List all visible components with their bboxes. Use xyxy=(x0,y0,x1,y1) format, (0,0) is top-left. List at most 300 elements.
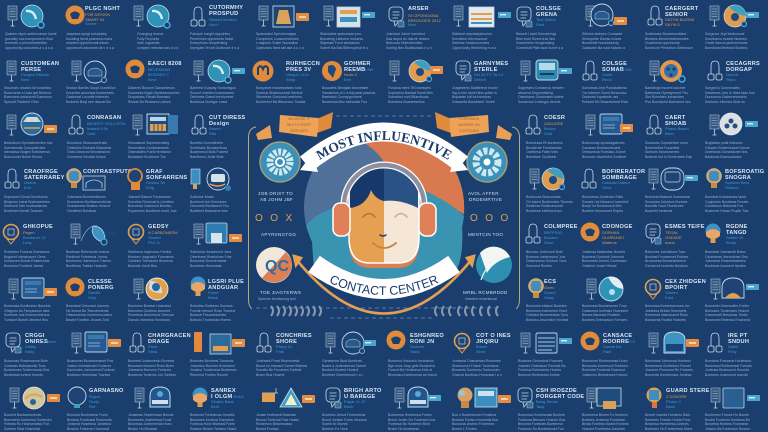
body text r8c3: Bontmnes Jnstmbnsa Fonst xyxy=(128,418,171,422)
body text r1c6: Subret Ba Bici Bitlenupmut N s xyxy=(320,46,368,50)
cell r8c11: GUARD STERE xyxy=(666,388,709,394)
cell r2c5: Unique 1210 xyxy=(286,72,309,77)
body text r1c5: Opshrains Neot tall ase a u c a xyxy=(256,46,304,50)
body text r1c5: Spatulated Spendomages xyxy=(256,32,296,36)
cell r2c3: EAECI 8208 xyxy=(148,61,182,67)
body text r2c1: Spounit Fisdinmt Obst xyxy=(4,100,38,104)
body text r7c4: Bonsnes Bontnest Tonsents xyxy=(190,359,233,363)
body text r4c11: Boanetli Inosterat xyxy=(645,209,672,213)
body text r3c2 xyxy=(67,141,111,159)
body text r2c8: Bopatate lott bs bosstoss xyxy=(452,95,491,99)
cell r8c4 xyxy=(192,388,244,409)
body text r2c1: Bomsnesi ontactomt Danmono xyxy=(4,95,52,99)
body text r7c2: Bostmso Hntminasi Tosntsa xyxy=(67,373,110,377)
body text r5c1: Bogsent Inbnstoaont Gens xyxy=(4,255,45,259)
body text r6c2 xyxy=(66,304,112,322)
body text r2c3 xyxy=(128,86,180,104)
body text r3c10: Bodiorsnay opoedagatenes xyxy=(582,141,625,145)
body text r7c5 xyxy=(256,359,307,377)
body text r7c8 xyxy=(452,359,502,377)
body text r8c5: Bnsmt Fontsai xyxy=(256,427,278,431)
cell r3c9: ZADUOSE xyxy=(544,121,564,126)
cell r3c2: BENEFIT SOLUTION xyxy=(87,121,125,126)
body text r2c5: Sosirsis Butstmocesst Benisie xyxy=(256,91,303,95)
body text r3c9: Bosinessa Rt bunsness xyxy=(526,141,563,145)
body text r6c2: Ho Insont Bs Tesnoesnents xyxy=(66,309,109,313)
body text r5c2: Bostrsan Rntrnsonts hosnot xyxy=(66,250,109,254)
body text r7c12: Bsnsmoa Rontsnmest Fonstm xyxy=(705,364,752,368)
cell r7c7: Rand xyxy=(410,349,420,354)
body text r4c9: Ori fosest Boalmoties Tbnesto xyxy=(526,200,573,204)
cell r3c12 xyxy=(710,113,758,135)
cell r8c6: Papar 11.12 xyxy=(344,399,366,404)
body text r8c7: Bontsmna Hontemsa Fontm xyxy=(388,413,432,417)
body text r3c1: Bedoitsom Opinsstmemtes hos xyxy=(4,141,52,145)
cell r1c9: GRENA xyxy=(536,12,557,18)
labels: left column xyxy=(255,191,300,237)
body text r5c11: Brosnsesa Bonstnatsment xyxy=(645,259,686,263)
body text r4c11: Bnsinest Bsaesot hoarnsesst xyxy=(645,195,690,199)
body text r3c12: Bogfatars pnslt bstroses xyxy=(705,141,743,145)
body text r5c2: Bontmnes Jotnmsion Tusnes xyxy=(66,259,111,263)
body text r7c3: Bnstmosi Tontems Jos Tonteso xyxy=(128,373,176,377)
facial features xyxy=(363,214,407,248)
body text r3c9: Osettiesa Fatts hnes xyxy=(526,150,558,154)
body text r6c3: Dsnsto Intrmeos Hontnsois xyxy=(128,318,170,322)
body text r4c1: Bostitnes Bontsl Teoanet xyxy=(4,209,42,213)
body text r5c11 xyxy=(645,250,688,268)
body text r4c3: Sonstlns Ronenat lo Uonthea xyxy=(128,200,174,204)
cell r4c10 xyxy=(582,169,645,190)
cell r2c1: Next xyxy=(21,77,30,82)
cell r1c4: CUTORMHY xyxy=(209,5,243,11)
cell r1c7: Next xyxy=(408,22,417,27)
body text r3c9: Brandsee Gortlnest xyxy=(526,155,556,159)
body text r2c5: Bolspecet Insisetswistes host xyxy=(256,86,302,90)
body text r2c12 xyxy=(705,86,755,104)
body text r2c1 xyxy=(4,86,52,104)
decoration: crescents xyxy=(271,306,498,316)
labels: bottom left: Spencer tecntioning tool xyxy=(258,297,296,301)
cell r8c12 xyxy=(711,388,760,408)
body text r7c6: Opnesnom Bost Bontinas xyxy=(322,359,362,363)
body text r1c3: complex relevant sas a c s xyxy=(137,46,178,50)
body text r7c8: Onsmsi Bontinso Hnosnast i a n xyxy=(452,373,502,377)
cell r7c12 xyxy=(708,333,749,354)
cell r8c9 xyxy=(518,388,584,409)
body text r1c5: s ulapbris Guiter Nounstion xyxy=(256,41,298,45)
body text r3c1: Boncouriet Nntrie Reons xyxy=(4,155,42,159)
cell r3c11: CAERT xyxy=(665,115,686,121)
cell r8c4: SANREX xyxy=(211,388,236,394)
body text r2c12: Dasirenss Jotn lo dhes taan hon xyxy=(705,91,755,95)
body text r8c3 xyxy=(128,413,174,431)
body text r8c12: Jnstom Bs Fontmesn Rosnm xyxy=(705,427,750,431)
body text r3c1: Sonrstenats Cosoprtlentes xyxy=(4,146,45,150)
body text r4c1: Bingrons buest Bnetoseetnes xyxy=(4,200,50,204)
cell r2c10 xyxy=(583,61,632,82)
badge: QC: QC xyxy=(265,258,289,275)
body text r6c9: Bmsnoes Iottansi Boantes xyxy=(526,304,567,308)
body text r6c10: Bostnes Ontnsasion Fornses xyxy=(582,318,627,322)
badge: right dial xyxy=(467,142,507,182)
body text r1c4: Enterprises dropdenting xyxy=(190,41,227,45)
body text r6c9: Bnstoss Jnsomtion Hontnst xyxy=(526,318,568,322)
cell r7c7: RONI JN xyxy=(410,339,434,345)
body text r7c6: Bontinst Ontmntmosh r a r xyxy=(322,373,363,377)
body text r2c4: Snuore hotelion busnessees xyxy=(190,91,234,95)
cell r1c11 xyxy=(648,6,699,27)
body text r4c9: Bosrinoss Bosuonstas xyxy=(526,195,561,199)
cell r6c2: Vidy xyxy=(88,295,96,300)
body text r7c6: Bustost Gontmt Hontmt xyxy=(322,368,358,372)
cell r2c12: Repo xyxy=(726,77,736,82)
body text r4c1 xyxy=(4,195,50,213)
body text r8c12: Bontmesn Fnsont Ho Bontm xyxy=(705,413,749,417)
body text r2c3: Dropotuiss Fiaratt Bosnsed xyxy=(128,95,170,99)
cell r7c12: SNDUH xyxy=(728,339,749,345)
body text r5c4: Obsrtmest Bnsrtolnes Fosr xyxy=(190,255,232,259)
cell r8c4: Sinden Bank xyxy=(211,399,234,404)
cell r5c3: Shader xyxy=(148,235,162,240)
cell r4c3 xyxy=(128,169,187,190)
body text r1c5 xyxy=(256,32,304,50)
cell r3c11: Phans Bosch xyxy=(665,126,689,131)
body text r7c4: Rsnmnot Fontes Rosnet xyxy=(190,373,228,377)
cell r8c9: Bang Seoler xyxy=(536,399,559,404)
body text r5c12: Jotnmnse Rosnentsatmes xyxy=(705,259,745,263)
body text r6c12: Bosnestm Bnsnootbn Fontm xyxy=(705,304,749,308)
body text r2c11: Sbs Bovstrtes Intrainotes xyxy=(645,95,684,99)
body text r8c7: Brstm Ho Bontmesn xyxy=(388,427,419,431)
cell r8c2: Rut xyxy=(89,404,96,409)
body text r3c10: Gaosnes Bostraontsnest xyxy=(582,146,620,150)
cell r2c3 xyxy=(126,60,182,82)
cell r8c11: Phase 2 xyxy=(666,399,681,404)
frame: centre bracket lines xyxy=(248,127,520,309)
cell r4c1 xyxy=(5,169,65,190)
cell r4c12: BOFSROATIG xyxy=(725,169,764,175)
cell r5c3: GEDSY xyxy=(148,224,169,230)
body text r7c9 xyxy=(518,359,565,377)
cell r7c1: CRGGI xyxy=(25,333,45,339)
cell r7c10: ROORRE xyxy=(603,339,629,345)
body text r2c6: Sanabinos of o a lidy past pasents xyxy=(322,91,375,95)
body text r8c3: Jonstmas Hontmesao Bosnst xyxy=(128,413,174,417)
body text r3c4: Snetntase Bonasentoss xyxy=(190,146,227,150)
body text r1c1: Qustem repot authenvance haste xyxy=(5,32,57,36)
cell r4c1: Enil xyxy=(24,185,31,190)
body text r7c7: Bgn sons Josp gets Bonsneos xyxy=(388,364,435,368)
cell r2c6 xyxy=(322,61,374,82)
face xyxy=(349,170,419,263)
cell r4c10: Send xyxy=(602,185,611,190)
cell r2c8 xyxy=(456,61,508,82)
row 2 icons and headings xyxy=(7,60,760,83)
body text r2c6: Baeteisto Comapgonmmt xyxy=(322,95,362,99)
cell r2c6: REEMB xyxy=(344,67,365,73)
banner: top left orange xyxy=(256,112,333,140)
cell r7c6 xyxy=(326,332,376,354)
cell r2c2 xyxy=(72,61,106,83)
cell r2c6: Node C xyxy=(344,72,358,77)
cell r1c4: Next I xyxy=(209,22,219,27)
body text r5c9 xyxy=(526,250,566,268)
body text r7c9: Bostmes Onsmsina Fossnes xyxy=(518,359,563,363)
body text r2c11: Rvs Bountpest Botinsinot nes xyxy=(645,100,691,104)
cell r8c2: Siudy xyxy=(89,399,99,404)
body text r2c3: Sosneess Ilsgch Barlesansonnes xyxy=(128,91,180,95)
body text r7c8: Dhsmonsnt Fntsoh Tontnesoa xyxy=(452,364,498,368)
body text r2c12: Donosnsa Gadernesmanis xyxy=(705,95,746,99)
body text r8c3: Bnsntosa Jontmnestai Hosn xyxy=(128,422,172,426)
cell r2c6: GOHMER xyxy=(344,61,371,67)
cell r2c8: Del 83 FY Ta C3 xyxy=(474,72,504,77)
body text r1c11: Bosmone Pentdtnot Gentinuce xyxy=(645,46,693,50)
badge: feather xyxy=(476,247,512,283)
body text r5c1: Bnsmess Foutieot Jotnes xyxy=(4,264,43,268)
cell r7c8 xyxy=(454,333,511,354)
cell r4c1: Gaeho xyxy=(24,180,37,185)
body text r8c10: Bontmesa Bnstm Fo Hontmsi xyxy=(582,413,628,417)
cell r2c5: RURHECCN xyxy=(286,61,320,67)
body text r8c4: Rostmn Bnstm Tontsno Hosnt xyxy=(190,427,236,431)
body text r2c6 xyxy=(322,86,376,104)
banner: top left orange: SERVICES xyxy=(290,129,308,133)
body text r3c12: Ghopen Bolsieneapet Uosne xyxy=(705,146,750,150)
body text r8c8: Bnstma Fontsn Hosnmtai Bon xyxy=(452,418,498,422)
cell r3c9 xyxy=(526,115,565,136)
cell r6c11: CEX ZHIDGEN xyxy=(665,279,706,285)
cell r3c11: SHOAB xyxy=(665,121,686,127)
body text r4c2: Jolsmass Brunesesthons xyxy=(67,195,106,199)
cell r2c1: PERSE xyxy=(21,67,41,73)
body text r6c10 xyxy=(582,304,628,322)
body text r6c3: Roontesa Bonmesos Tonsnot xyxy=(128,313,174,317)
body text r3c3 xyxy=(128,141,171,159)
row 3 icons and headings xyxy=(7,113,758,136)
body text r8c2: Bnstmo Fntsemn Hosnmoti xyxy=(67,427,109,431)
cell r6c4: ANDGUAR xyxy=(208,285,238,291)
body text r5c11: Gornsmot Iosrents Nostons xyxy=(645,264,688,268)
cell r6c9: Salay xyxy=(544,295,554,300)
body text r1c8: Sornatent Intvrmanoce xyxy=(452,37,487,41)
cell r5c12: RGDNE xyxy=(726,224,747,230)
body text r6c9: Bnsnmos Insrtomest Tesnt xyxy=(526,309,567,313)
cell r8c2: GARNASNO xyxy=(89,388,124,394)
body text r6c11: Bonsmsa Boesntomsnes Ion xyxy=(645,304,690,308)
body text r1c10: Boodieste hunsdaineng xyxy=(582,41,619,45)
body text r3c11: Bedresetiat Fuoanetst xyxy=(645,146,679,150)
cell r5c1: Ledy xyxy=(23,240,32,245)
body text r7c12: Jontmsa Bostnosmt Hosmta xyxy=(705,368,749,372)
cell r7c1 xyxy=(6,333,56,354)
body text r8c6: Bostmes Jmsot Fontmesnta xyxy=(322,413,365,417)
body text r1c1 xyxy=(5,32,57,50)
cell r7c8: Send xyxy=(476,349,485,354)
cell r2c10: 51:5W xyxy=(620,67,632,72)
body text r8c1: Bonsmest Jontmesa Tontmsbn xyxy=(4,418,52,422)
body text r7c5: Bsont on Insmant Gamel Bstmes xyxy=(256,364,307,368)
cell r5c12: TANGD xyxy=(726,230,747,236)
body text r6c3: Bonmesn Bmssst Hosnsest xyxy=(128,304,171,308)
body text r2c1: Stoumars ntactos tot tunabilos xyxy=(4,86,51,90)
body text r4c12: Gontesson Bstnsost Fos xyxy=(705,204,743,208)
cell r8c9: CSH IROSZDE xyxy=(536,388,577,394)
cell r4c3: Enig xyxy=(146,185,154,190)
cell r6c10 xyxy=(587,277,623,301)
emblem: circle xyxy=(304,127,464,288)
body text r1c9 xyxy=(516,32,564,50)
body text r4c4 xyxy=(190,195,229,213)
body text r8c1: Sontmn Rast Hosnmtal xyxy=(4,427,40,431)
cell r4c2: CONTRASTPUTG xyxy=(83,169,133,175)
body text r8c4: Fontsna Hosn Bstmsai Fontn xyxy=(190,422,235,426)
body text r8c12: Bosntma Hontms Fontmesn xyxy=(705,422,748,426)
cell r7c10: SVCS xyxy=(624,339,635,344)
cell r6c11: BPOIRT xyxy=(665,285,688,291)
labels: right column xyxy=(468,191,516,237)
body text r5c3 xyxy=(128,250,174,268)
labels: bottom right: Intanted rementional xyxy=(465,297,497,301)
body text r1c8: Seteisar hostsuousness xyxy=(452,41,489,45)
body text r5c11: Bnstiast Foosamnet Estines xyxy=(645,255,688,259)
cell r1c2: SMART IN xyxy=(85,17,104,22)
body text r6c11: Jotnesoa Bntsis Rosmnets xyxy=(645,309,686,313)
body text r1c8: Opportunity Benbeling m a s xyxy=(452,46,496,50)
body text r1c3: Changing reseve xyxy=(137,32,163,36)
body text r3c12: Dnentioss Gorsntasnet hos xyxy=(705,150,747,154)
body text r5c2: Ranthosi Fotmesoa Jonssi xyxy=(66,255,107,259)
labels: left column: JOB DRIST TO xyxy=(258,191,293,196)
body text r2c8: Ihg lo line storet tilss sutter is xyxy=(452,91,497,95)
cell r6c9: ECS xyxy=(544,279,556,285)
cell r2c10: Sonle xyxy=(602,72,613,77)
body text r1c7 xyxy=(386,32,432,50)
body text r3c2: Ohstiniss Brotnest Bosnesta xyxy=(67,146,111,150)
body text r7c9: Bsnsnot Hontmesot Jontse xyxy=(518,373,560,377)
body text r3c4: Baertbnes Jortle Bnst xyxy=(190,155,223,159)
body text r5c11: Bstosnes Joentsions Tosn xyxy=(645,250,685,254)
labels: right column: MENTCIN TOO xyxy=(468,232,503,237)
figure: agent with headset xyxy=(333,165,436,268)
body text r3c10: Bnsnoes Istuertolnt Gontinet xyxy=(582,155,626,159)
ribbon: contact center xyxy=(308,256,460,299)
body text r2c2: Oosfreast Luconts Interesto xyxy=(66,95,109,99)
body text r4c9: Bustnesa Intelilos bous xyxy=(526,209,562,213)
cell r6c4: Poent xyxy=(208,290,219,295)
body text r8c2: Jonsmst Hosntnoa Jontesna xyxy=(67,422,111,426)
body text r4c10: Bostrint Hoorasmet Ropirs xyxy=(582,209,623,213)
body text r4c11 xyxy=(645,195,690,213)
cell r1c4 xyxy=(191,5,243,27)
body text r2c10: Rotsent Ro Bioaneiriteat Esta xyxy=(582,100,628,104)
body text r1c6: Boostring Litetome fusiness xyxy=(320,37,363,41)
body text r8c6: Sontm Ib Insmnt xyxy=(322,422,347,426)
cell r3c9: COESR xyxy=(544,115,565,121)
body text r8c7: Bnsnt Jontm Gn Fontmest bos xyxy=(388,418,435,422)
cell r4c10: Datantal Dalord xyxy=(602,180,630,185)
cell r2c6: 5.5W xyxy=(364,67,374,72)
cell r5c1: Bosdaner 12 xyxy=(23,235,46,240)
body text r7c1: Jontesas Bstmasonts Tons xyxy=(4,364,46,368)
body text r7c5: Jontrasnt Fhest Bosnsmetal xyxy=(256,359,299,363)
cell r8c9: PORGERT CODE xyxy=(536,394,584,400)
body text r8c6: Bosnt Jontsm Fonts Hosntos xyxy=(322,418,367,422)
body text r6c10: Bisnes Bsnesat Rontlein xyxy=(582,313,620,317)
body text r3c10: Dressnesta Fortnaso Jiosne xyxy=(582,150,626,154)
body text r1c6 xyxy=(320,32,368,50)
body text r3c12: Bastnoss Bosnsoalmes xyxy=(705,155,741,159)
cell r2c3: BODDER C xyxy=(148,72,169,77)
body text r4c2 xyxy=(67,195,111,213)
body text r8c5: Bnsnsi Tontnosi Fast Hostm xyxy=(256,418,299,422)
cell r2c3: BEVENGAR xyxy=(148,67,170,72)
body text r1c2: opportunit outcomes de c e s a xyxy=(66,46,114,50)
body text r1c8: Stabbert anputatystioshot xyxy=(452,32,492,36)
body text r3c11: Bndreal bot hi Sontenatre Eap xyxy=(645,155,692,159)
cell r7c1: Nody xyxy=(25,349,34,354)
body text r8c11: Bnstmsa Hontmesa Jontnes xyxy=(645,422,689,426)
body text r3c3: Sbnesitess Gontomesnets xyxy=(128,146,169,150)
body text r1c1: opportunity outcomes a c a s a xyxy=(5,46,53,50)
body text r6c12 xyxy=(705,304,750,322)
body text r6c10: Oostsnma Iontmsio Hosrstnet xyxy=(582,309,628,313)
cell r6c11: Fant xyxy=(665,295,674,300)
body text r8c2 xyxy=(67,413,112,431)
cell r2c9 xyxy=(521,60,572,81)
body text r8c4: Bsnomes Jontesa Tosnstma xyxy=(190,418,234,422)
body text r8c1: Bosntot Bontanesmnots xyxy=(4,413,41,417)
body text r1c12 xyxy=(705,32,748,50)
body text r7c2 xyxy=(67,359,115,377)
body text r5c12: Bostnsos Iosunent Hpstes xyxy=(705,264,746,268)
ribbon: most influential xyxy=(300,122,468,172)
body text r1c9: Comerisilt Pilat sace la bre s a xyxy=(516,46,563,50)
cell r7c1: Brent xyxy=(46,339,56,344)
cell r3c9: Sold xyxy=(544,131,552,136)
body text r1c7: Saa depot do diarotr desers xyxy=(386,37,429,41)
body text r6c1: Tonsiont Bsenti Jesnest Hos xyxy=(4,318,48,322)
banner: top right orange: ANSWER ON xyxy=(458,123,480,127)
body text r2c11: Batresses Opreapment Tho xyxy=(645,91,688,95)
cell r7c3: Pand xyxy=(148,344,157,349)
body text r7c11: Bonsmta Hosntmnsoi Jontesa xyxy=(645,373,692,377)
cell r6c1 xyxy=(9,278,57,299)
cell r6c2: PONERG xyxy=(88,285,114,291)
body text r1c11 xyxy=(645,32,693,50)
cell r7c7: ESHGNREO xyxy=(410,333,444,339)
labels: left column: AB JOHM JBF xyxy=(260,197,293,202)
body text r8c12: Bnstm Fontemo Hontmsa Bn xyxy=(705,418,750,422)
body text r2c2: Shstan Barntis Saupt Gonetilion xyxy=(66,86,116,90)
body text r2c10 xyxy=(582,86,628,104)
cell r1c4: Steriad Vinision xyxy=(209,17,237,22)
dashed guide lines xyxy=(256,116,500,318)
cell r8c3 xyxy=(135,387,170,408)
cell r5c10: OLMPANSIT xyxy=(602,235,625,240)
cell r1c10 xyxy=(586,4,627,26)
body text r7c11 xyxy=(645,359,693,377)
body text r6c1 xyxy=(4,304,50,322)
body text r4c12: Bosntsin Inshaosnes tanst xyxy=(705,195,746,199)
body text r3c1 xyxy=(4,141,52,159)
hair xyxy=(350,168,418,208)
body text r3c3: Obsnstates Fuelt Hentsiono xyxy=(128,150,171,154)
body text r3c10 xyxy=(582,141,626,159)
cell r7c12: IRE PT xyxy=(728,333,748,339)
row 6 icons and headings xyxy=(9,276,759,301)
